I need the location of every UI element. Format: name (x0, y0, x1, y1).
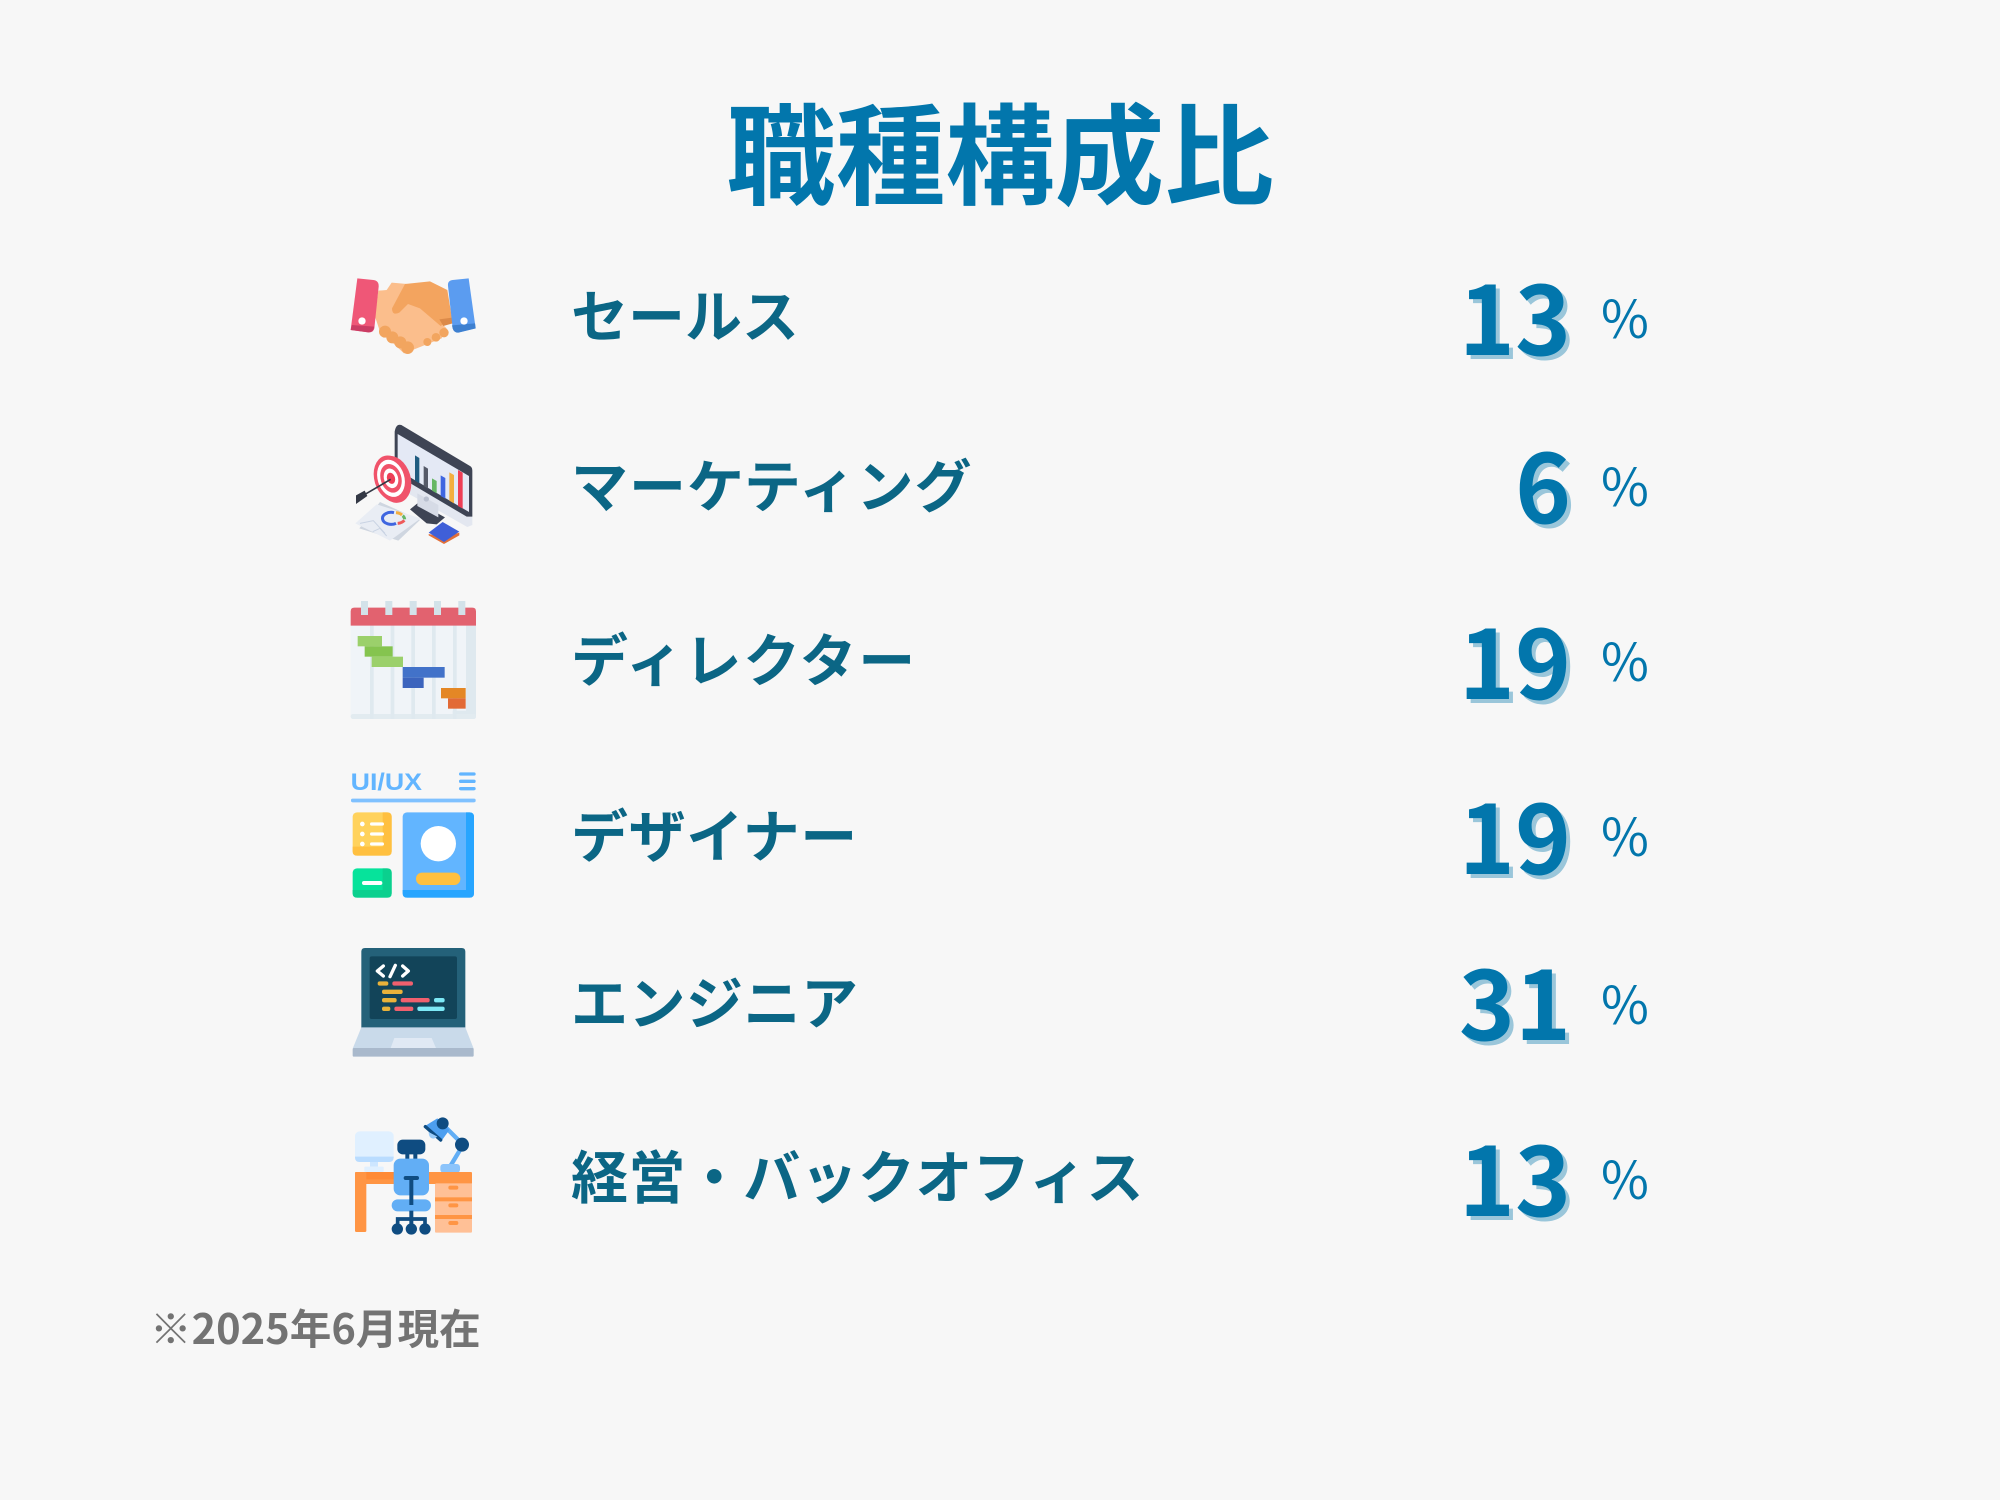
title: 職種構成比 (726, 69, 1274, 228)
icon: UI/UX wireframe (351, 769, 476, 898)
value: 19 (1459, 590, 1571, 727)
icon: UI/UX wireframe: UI/UX (351, 769, 422, 796)
icon: gantt calendar (350, 601, 476, 719)
row: designer (351, 765, 1649, 902)
unit: % (1601, 446, 1649, 521)
icon: laptop with code (352, 948, 474, 1057)
row: back office (355, 1107, 1649, 1244)
row: engineer (352, 931, 1649, 1068)
icon: office desk and chair (355, 1117, 472, 1235)
row: director (350, 590, 1649, 727)
label: エンジニア (571, 959, 858, 1041)
label: ディレクター (571, 616, 917, 698)
value: 6 (1515, 414, 1571, 551)
label: セールス (571, 272, 799, 354)
value: 13 (1459, 1107, 1571, 1244)
unit: % (1601, 1139, 1649, 1214)
unit: % (1601, 621, 1649, 696)
row: marketing (356, 414, 1649, 551)
unit: % (1601, 964, 1649, 1039)
unit: % (1601, 278, 1649, 353)
value: 19 (1459, 765, 1571, 902)
label: 経営・バックオフィス (571, 1133, 1144, 1215)
footnote: ※2025年6月現在 (150, 1296, 481, 1356)
label: デザイナー (571, 792, 858, 874)
icon: handshake (350, 278, 476, 354)
label: マーケティング (571, 442, 972, 524)
value: 13 (1459, 246, 1571, 383)
icon: monitor and target (356, 424, 472, 544)
unit: % (1601, 796, 1649, 871)
row: sales (350, 246, 1649, 383)
value: 31 (1459, 931, 1571, 1068)
